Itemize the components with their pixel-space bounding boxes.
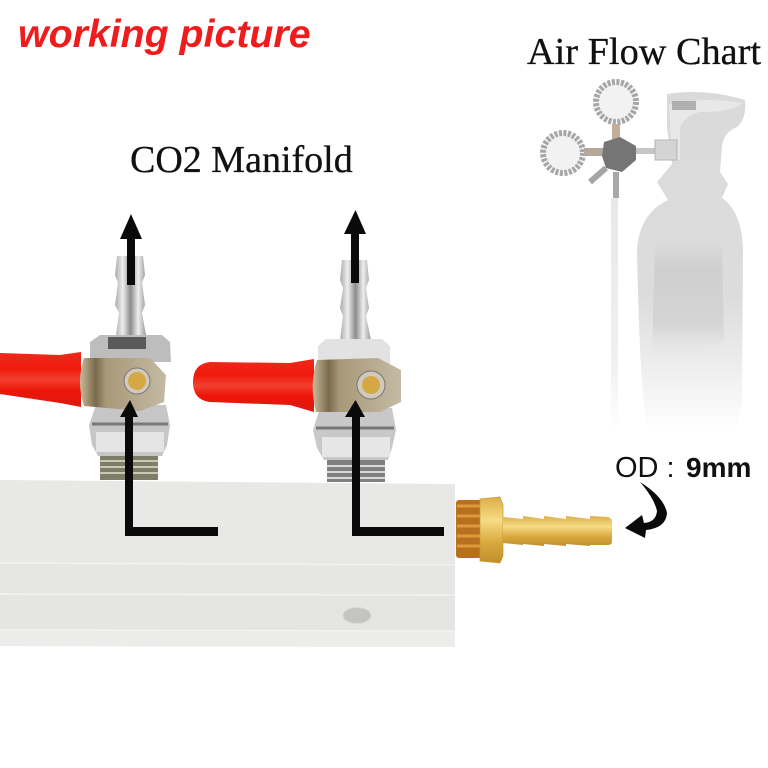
arrow: inlet 2 bbox=[345, 400, 444, 536]
bracket bbox=[80, 358, 166, 411]
arrow: outlet 2 bbox=[344, 210, 366, 283]
mounting hole bbox=[343, 608, 371, 624]
illustration: CO2 cylinder and regulator bbox=[543, 82, 745, 432]
valve 1 bbox=[0, 256, 171, 480]
brass barb fitting bbox=[456, 497, 612, 563]
label: OD 9mm: OD : bbox=[615, 452, 675, 484]
valve 2 bbox=[193, 260, 401, 482]
arrow: outlet 1 bbox=[120, 214, 142, 285]
hex nut bbox=[318, 339, 390, 365]
label: OD 9mm: 9mm bbox=[686, 452, 751, 483]
title: working picture: working picture bbox=[18, 12, 311, 56]
heading: CO2 Manifold: CO2 Manifold bbox=[130, 139, 353, 181]
hex nut bbox=[90, 335, 171, 362]
lower body bbox=[313, 408, 396, 460]
lower body bbox=[89, 405, 170, 456]
arrow: inlet 1 bbox=[120, 400, 218, 536]
thread bbox=[100, 455, 158, 480]
barb stem bbox=[115, 256, 146, 335]
heading: Air Flow Chart: Air Flow Chart bbox=[527, 31, 761, 73]
red handle bbox=[193, 359, 314, 412]
brass screw bbox=[124, 368, 150, 394]
manifold body bbox=[0, 480, 455, 647]
arrow: curved pointer to barb bbox=[625, 482, 667, 538]
red handle bbox=[0, 352, 81, 407]
barb stem bbox=[340, 260, 371, 340]
bracket bbox=[313, 358, 401, 412]
brass screw bbox=[357, 371, 385, 399]
thread bbox=[327, 460, 385, 482]
